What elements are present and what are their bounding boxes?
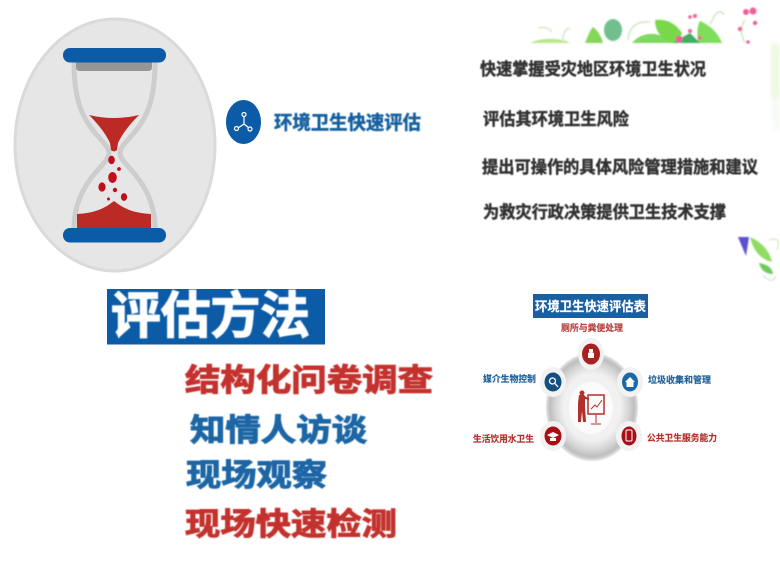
- node: waste: [617, 367, 643, 397]
- label: toilets: 厕所与粪便处理: [561, 322, 623, 333]
- list: assessment methods: [185, 363, 433, 542]
- goal 1: 快速掌握受灾地区环境卫生状况: [480, 59, 706, 79]
- node: public health services: [616, 421, 642, 451]
- method 3: 现场观察: [186, 458, 327, 493]
- heading: rapid assessment: 环境卫生快速评估: [274, 111, 421, 134]
- goal 4: 为救灾行政决策提供卫生技术支撑: [483, 202, 726, 222]
- label: waste: 垃圾收集和管理: [648, 374, 711, 385]
- decoration: lower right flower: [738, 237, 778, 280]
- decoration: top floral border: [530, 8, 757, 44]
- text block: assessment goals: [480, 59, 758, 222]
- center circle with presenter icon: [569, 382, 613, 434]
- node: toilets: [578, 338, 604, 370]
- wheel ring: [546, 353, 638, 461]
- heading: assessment form: 环境卫生快速评估表: [535, 299, 646, 314]
- method 1: 结构化问卷调查: [185, 363, 433, 398]
- diagram: assessment form wheel: [473, 322, 717, 461]
- goal 2: 评估其环境卫生风险: [483, 109, 629, 129]
- goal 3: 提出可操作的具体风险管理措施和建议: [482, 157, 758, 177]
- icon: hourglass in grey oval: [15, 19, 215, 271]
- label: vector control: 媒介生物控制: [483, 373, 536, 384]
- label: public health services: 公共卫生服务能力: [647, 432, 717, 443]
- method 2: 知情人访谈: [190, 413, 367, 448]
- icon: network nodes in blue circle: [226, 100, 261, 144]
- heading: assessment form: [533, 294, 648, 318]
- node: vector control: [540, 367, 566, 397]
- method 4: 现场快速检测: [185, 507, 397, 542]
- decoration: right edge foliage: [771, 44, 780, 130]
- heading: assessment methods: 评估方法: [111, 288, 310, 344]
- node: drinking water: [540, 421, 566, 451]
- label: drinking water: 生活饮用水卫生: [473, 433, 534, 444]
